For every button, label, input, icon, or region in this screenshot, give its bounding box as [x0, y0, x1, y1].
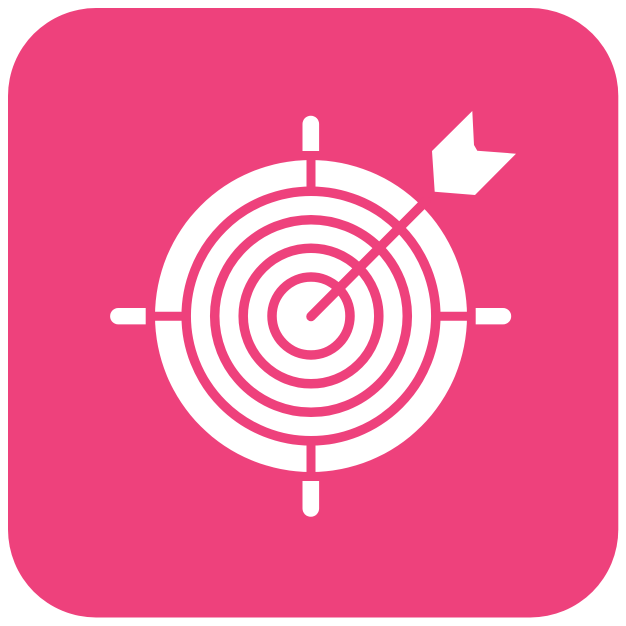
arrow fletching — [432, 111, 516, 195]
arrow shaft — [311, 201, 426, 316]
crosshair tick: top — [302, 116, 319, 151]
crosshair tick: right — [476, 308, 511, 324]
crosshair tick: left — [110, 308, 146, 324]
target: concentric rings — [150, 155, 472, 477]
crosshair tick: bottom — [302, 481, 319, 517]
